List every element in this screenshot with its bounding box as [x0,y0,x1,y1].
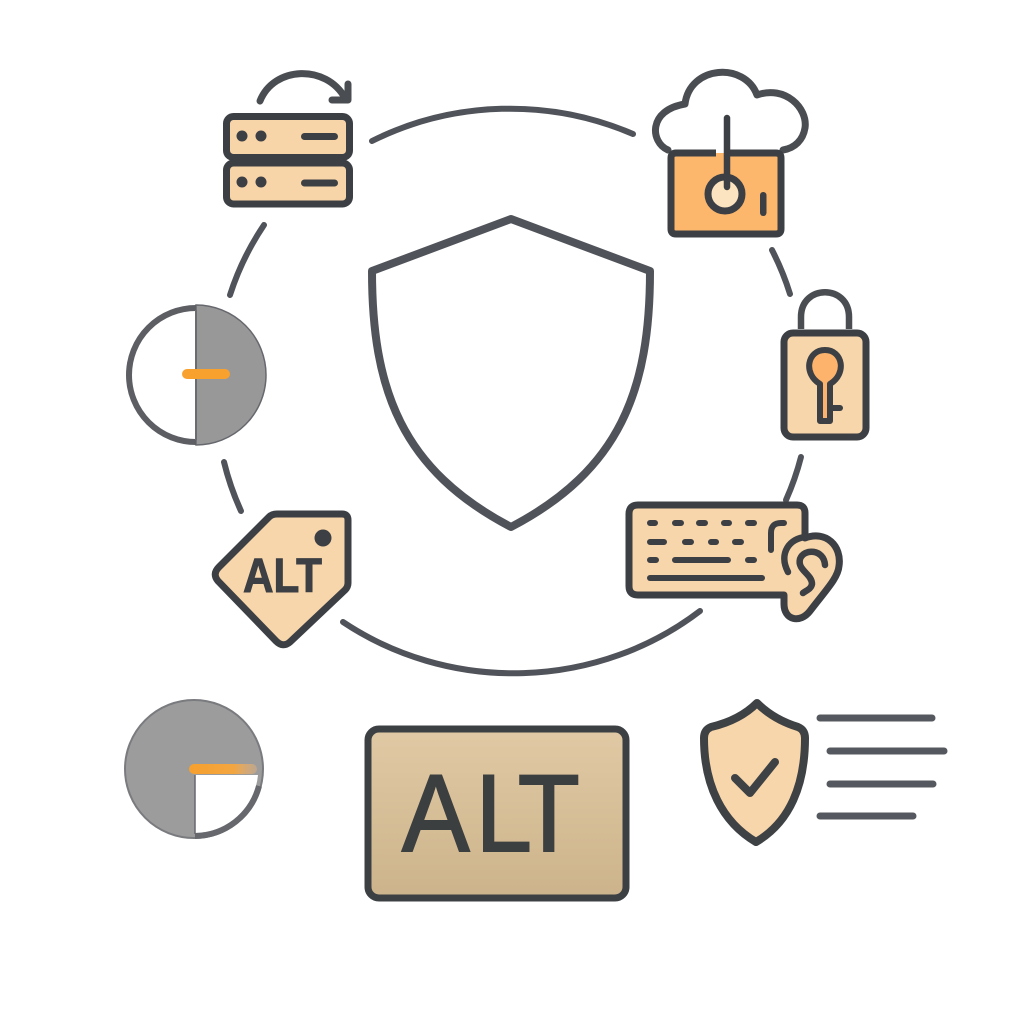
icon: server stack with rotate arrow [226,74,350,204]
icon: cloud with safe box [655,72,805,234]
shaded half [196,305,266,445]
keyboard keys [650,523,784,578]
tag label: ALT [243,550,322,603]
icon: padlock with keyhole [784,292,866,437]
ALT label box [368,729,626,898]
orange hand [182,369,230,379]
icon: mostly shaded clock [125,700,263,838]
icon: half shaded clock [129,305,266,445]
icon: ALT tag [215,514,348,645]
icon: shield with check [704,703,805,842]
shaded disc [125,700,263,838]
server unit bottom [226,163,350,204]
tag body [215,514,348,645]
keyhole key [809,350,841,421]
small shield body [704,703,805,842]
central shield outline [372,219,650,527]
server unit top [226,116,350,158]
safe handle [760,192,766,216]
check mark [735,762,775,793]
safe box [671,153,781,234]
ring of arc segments connecting icons [224,109,801,673]
ear detail [784,537,825,593]
white wedge [195,775,258,833]
shackle [801,292,849,329]
keyboard and ear body [629,505,839,619]
orange hand [189,764,257,774]
cloud outline [655,72,805,150]
rotate arrow [260,74,348,101]
cable line [724,118,730,187]
ALT text: ALT [402,752,580,875]
tag hole [314,530,332,546]
clock ring left half [129,308,196,442]
wedge rim [195,786,259,836]
text lines list [820,718,944,816]
divider [195,310,197,440]
wedge divider [194,775,196,834]
icon: keyboard with ear [629,505,839,619]
lock body [784,333,866,437]
safe dial [708,177,742,211]
